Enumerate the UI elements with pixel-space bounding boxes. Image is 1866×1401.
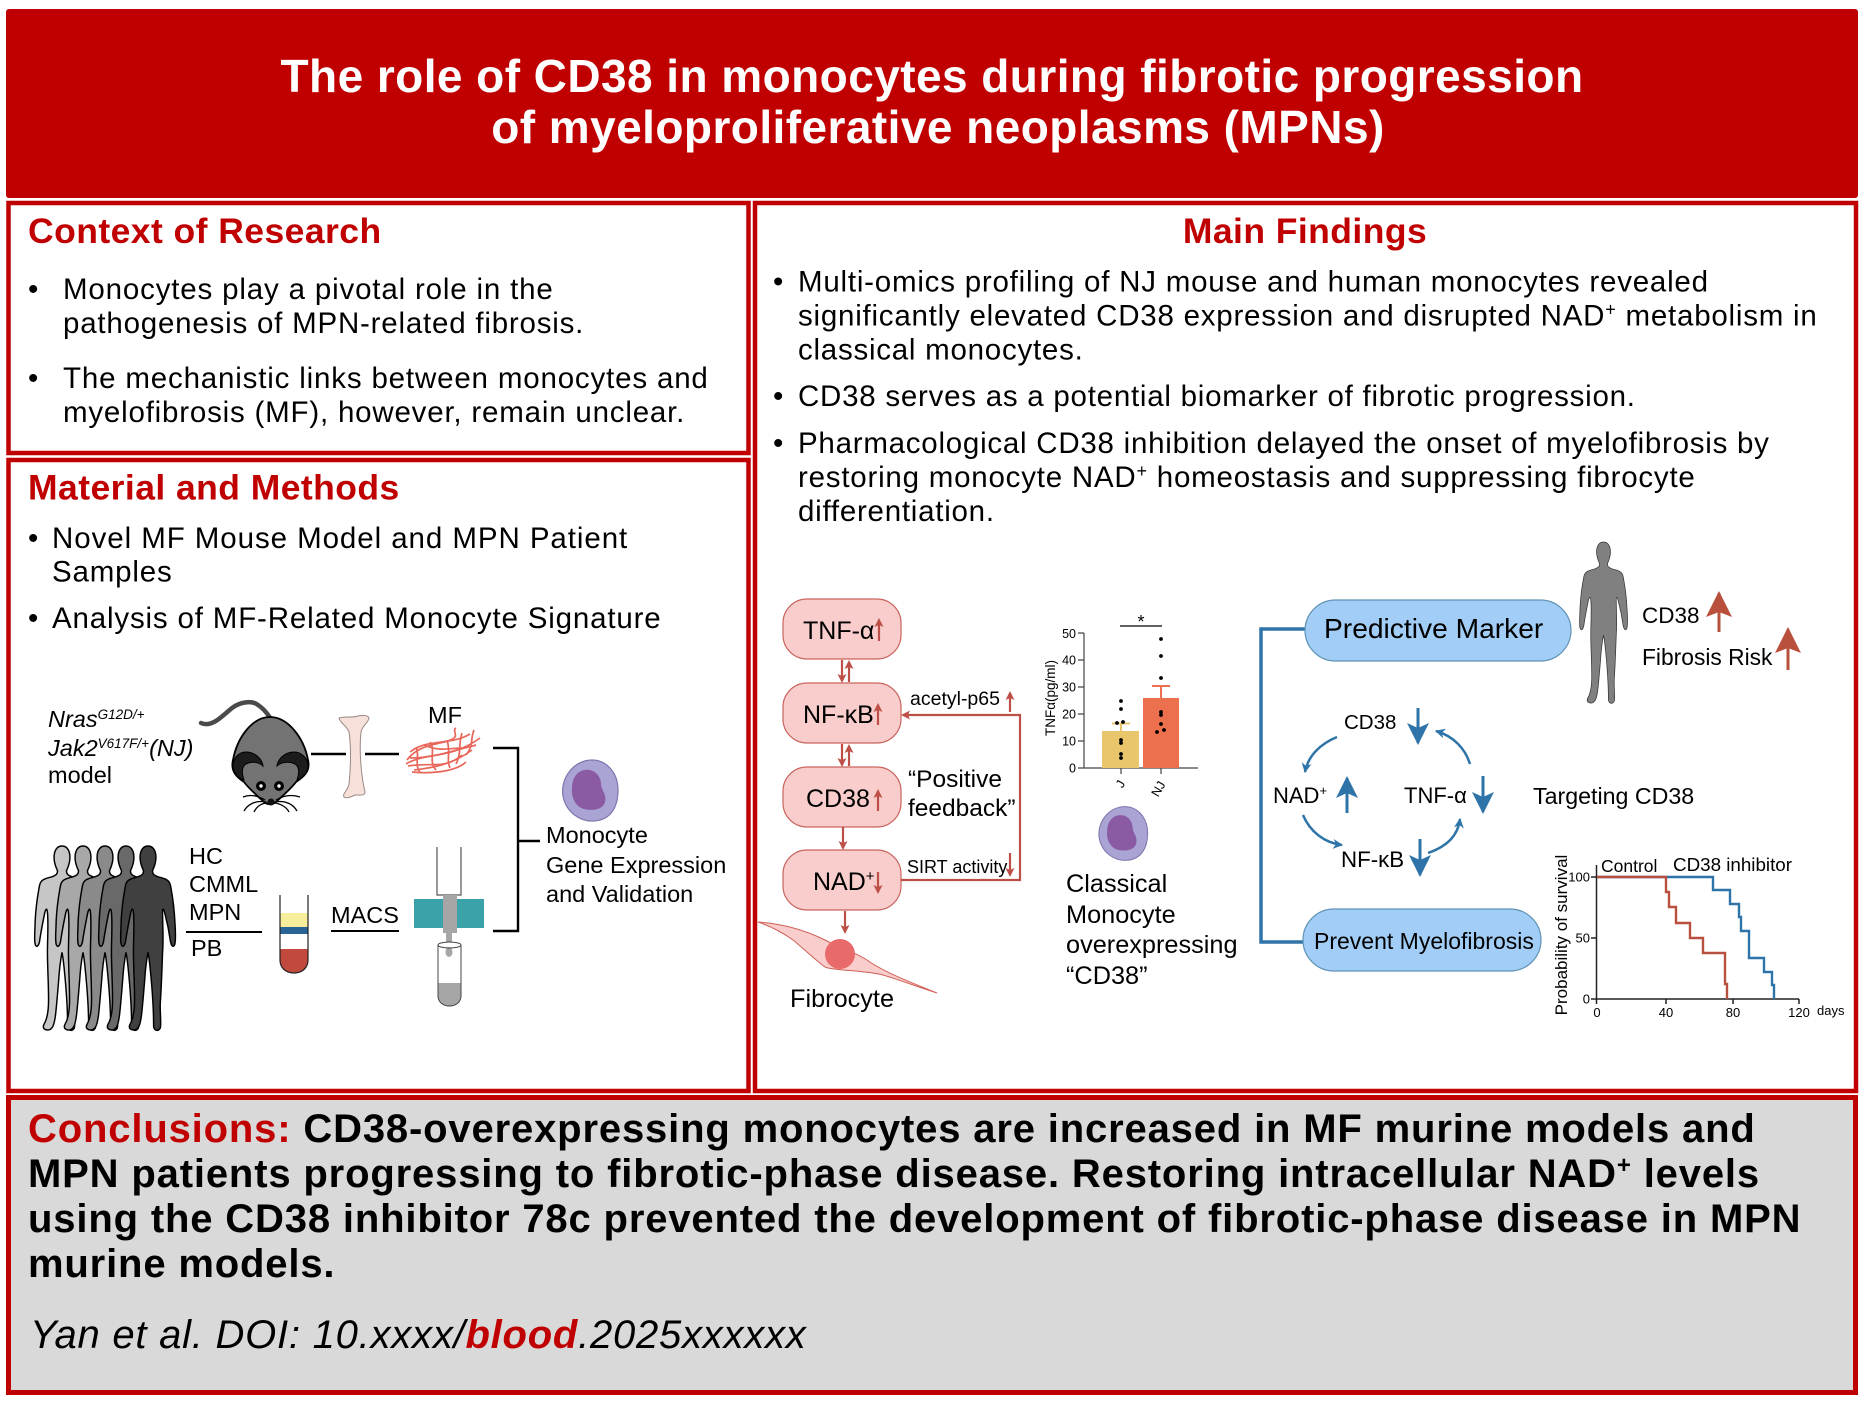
- text block: methods bullets: [28, 522, 662, 635]
- curve: CD38 inhibitor: [1597, 877, 1774, 999]
- text block: findings bullets: classical monocytes.: [798, 334, 1084, 366]
- tick labels: [1568, 870, 1845, 1020]
- label: SIRT activity: SIRT activity: [907, 857, 1007, 877]
- group labels: NJ: [1149, 779, 1168, 799]
- text: classical monocyte overexpressing CD38: overexpressing: [1066, 931, 1238, 959]
- panel: main findings: [755, 203, 1856, 1091]
- node: CD38: [1344, 708, 1418, 743]
- label: targeting CD38: Targeting CD38: [1533, 783, 1694, 809]
- title: The role of CD38 in monocytes during fibrotic progression: [280, 50, 1584, 102]
- label: CD38 up: [1642, 593, 1719, 632]
- text: monocyte gene expression and validation: and Validation: [546, 881, 693, 907]
- labels: HC CMML MPN PB: PB: [191, 935, 222, 961]
- box: NAD+: NAD: [813, 868, 866, 896]
- icon: mouse: [201, 702, 309, 812]
- text block: context bullets: •: [28, 273, 39, 306]
- text block: conclusions: levels: [1632, 1152, 1760, 1196]
- axis tick labels: 50: [1062, 627, 1076, 641]
- axis tick labels: 30: [1062, 680, 1076, 694]
- label: fibrosis risk up: Fibrosis Risk: [1642, 644, 1773, 670]
- bracket connector: [493, 748, 540, 931]
- node: CD38: CD38: [1344, 711, 1396, 734]
- pill: predictive marker: Predictive Marker: [1324, 612, 1543, 644]
- icon: bone: [339, 715, 369, 798]
- labels: HC CMML MPN PB: CMML: [189, 871, 258, 897]
- box: NAD+: +: [866, 868, 875, 885]
- text block: conclusions: Conclusions: CD38-overexpressing monocytes are increased in MF murine models and: [28, 1107, 1756, 1151]
- text block: findings bullets: Multi-omics profiling of NJ mouse and human monocytes revealed: [798, 266, 1709, 298]
- group labels: [1113, 778, 1168, 799]
- text block: methods bullets: Analysis of MF-Related Monocyte Signature: [52, 602, 662, 635]
- box: NAD+: [783, 850, 901, 910]
- group labels: J: [1113, 778, 1128, 790]
- tick labels: 50: [1576, 930, 1590, 946]
- axis tick labels: [1062, 627, 1076, 776]
- bar chart: TNF alpha: [1043, 612, 1198, 799]
- axes: [1591, 865, 1799, 1004]
- axis tick labels: 10: [1062, 734, 1076, 748]
- text block: context bullets: [28, 273, 709, 429]
- axis tick labels: 20: [1062, 708, 1076, 722]
- text block: methods bullets: •: [28, 602, 39, 635]
- label: NJ model: (NJ): [149, 735, 193, 761]
- bar: NJ: [1143, 686, 1179, 768]
- text: classical monocyte overexpressing CD38: Monocyte: [1066, 901, 1176, 929]
- node: NAD+: NAD: [1273, 783, 1319, 808]
- pill: predictive marker: [1305, 600, 1571, 661]
- label: MACS: MACS: [331, 902, 399, 928]
- icon: MACS column: [414, 847, 484, 1006]
- heading: main findings: Main Findings: [1183, 211, 1427, 251]
- label: NJ model: Nras: [48, 706, 98, 732]
- text block: findings bullets: metabolism in: [1617, 300, 1818, 332]
- y axis title: Probability of survival: [1552, 855, 1571, 1015]
- survival chart: [1552, 854, 1845, 1020]
- text: classical monocyte overexpressing CD38: “CD38”: [1066, 962, 1148, 990]
- text block: findings bullets: CD38 serves as a potential biomarker of fibrotic progression.: [798, 380, 1636, 413]
- icon: classical monocyte: [1099, 807, 1148, 860]
- icon: fibrosis fibres: [406, 728, 480, 773]
- label: positive feedback: [908, 766, 1016, 822]
- tick labels: 80: [1726, 1005, 1740, 1020]
- label: NJ model: Jak2: [48, 735, 98, 761]
- labels: HC CMML MPN PB: MPN: [189, 899, 241, 925]
- text block: context bullets: pathogenesis of MPN-related fibrosis.: [63, 307, 584, 340]
- label: NJ model: V617F/+: [98, 736, 149, 751]
- tick labels: 0: [1593, 1005, 1601, 1020]
- text block: findings bullets: •: [773, 380, 784, 413]
- text block: findings bullets: •: [773, 266, 784, 298]
- pill: prevent myelofibrosis: [1303, 909, 1541, 971]
- text: classical monocyte overexpressing CD38: Classical: [1066, 870, 1167, 898]
- icon: fibrocyte: [758, 922, 937, 993]
- label: positive feedback: “Positive: [908, 766, 1002, 793]
- icon: blood tube: [280, 895, 308, 973]
- text block: findings bullets: +: [1137, 461, 1148, 481]
- title: of myeloproliferative neoplasms (MPNs): [491, 101, 1385, 153]
- label: NJ model: [47, 706, 193, 788]
- text block: findings bullets: homeostasis and suppressing fibrocyte: [1148, 461, 1696, 494]
- tick labels: 0: [1583, 992, 1590, 1006]
- label: CD38 up: CD38: [1642, 603, 1700, 628]
- tick labels: days: [1817, 1003, 1845, 1018]
- curve: control: [1597, 877, 1727, 999]
- labels: HC CMML MPN PB: HC: [189, 843, 223, 869]
- legend labels: Control: [1601, 856, 1657, 876]
- text block: conclusions: MPN patients progressing to fibrotic-phase disease. Restoring intracellular NAD: [28, 1152, 1617, 1196]
- title: [280, 50, 1584, 153]
- node: NF-kB: [1341, 839, 1420, 875]
- cycle arrows: [1303, 731, 1470, 853]
- text block: conclusions: murine models.: [28, 1242, 335, 1286]
- tick labels: 100: [1568, 870, 1590, 884]
- pill: prevent myelofibrosis: Prevent Myelofibrosis: [1314, 928, 1534, 954]
- box: NF-kB: NF-κB: [803, 701, 874, 729]
- label: fibrocyte: Fibrocyte: [790, 985, 894, 1013]
- box: CD38: [783, 767, 901, 827]
- text block: findings bullets: differentiation.: [798, 495, 995, 528]
- text block: findings bullets: restoring monocyte NAD: [798, 461, 1137, 494]
- connector: predictive marker to prevent myelofibrosis: [1261, 629, 1305, 942]
- text block: findings bullets: significantly elevated CD38 expression and disrupted NAD: [798, 300, 1605, 332]
- heading: context of research: Context of Research: [28, 211, 382, 251]
- text block: findings bullets: +: [1605, 300, 1617, 320]
- axis tick labels: 40: [1062, 654, 1076, 668]
- node: NF-kB: NF-κB: [1341, 847, 1404, 872]
- arrows between boxes: [842, 660, 849, 932]
- citation: Yan et al. DOI: 10.xxxx/blood.2025xxxxxx: [30, 1313, 808, 1357]
- node: NAD+: [1273, 778, 1347, 813]
- icon: group of people: [35, 846, 176, 1030]
- text block: context bullets: •: [28, 362, 39, 395]
- header banner: [6, 9, 1858, 198]
- panel: material and methods: [8, 460, 748, 1091]
- legend labels: [1601, 854, 1792, 876]
- text block: conclusions: [28, 1107, 1801, 1286]
- text block: methods bullets: Samples: [52, 556, 173, 588]
- panel: conclusions: [8, 1098, 1856, 1392]
- node: TNF-alpha: [1404, 776, 1483, 812]
- label: acetyl-p65: acetyl-p65: [910, 688, 1000, 710]
- panel: context of research: [8, 203, 748, 453]
- axis tick labels: 0: [1069, 762, 1076, 776]
- box: CD38: CD38: [806, 785, 870, 813]
- box: TNF-alpha: [783, 599, 901, 659]
- significance bar: *: [1137, 612, 1145, 632]
- text block: findings bullets: •: [773, 427, 784, 460]
- text block: context bullets: myelofibrosis (MF), however, remain unclear.: [63, 396, 685, 429]
- node: NAD+: +: [1319, 783, 1327, 798]
- text: classical monocyte overexpressing CD38: [1066, 870, 1238, 990]
- data points: [1115, 637, 1166, 760]
- text block: findings bullets: [773, 266, 1818, 528]
- label: MF: MF: [428, 702, 462, 728]
- feedback loop arrow: [901, 715, 1020, 880]
- icon: patient silhouette: [1580, 542, 1628, 703]
- labels: HC CMML MPN PB: [186, 843, 262, 961]
- heading: material and methods: Material and Methods: [28, 468, 400, 508]
- significance bar: [1120, 612, 1162, 632]
- tick labels: 40: [1659, 1005, 1673, 1020]
- text block: conclusions: using the CD38 inhibitor 78c prevented the development of fibrotic-phase disease in MPN: [28, 1197, 1801, 1241]
- bar: J: [1102, 723, 1139, 768]
- cycle: targeting CD38: [1273, 708, 1694, 875]
- box: NF-kB: [783, 683, 901, 743]
- text block: methods bullets: •: [28, 522, 39, 555]
- label: NJ model: model: [48, 762, 112, 788]
- text block: context bullets: Monocytes play a pivotal role in the: [63, 273, 554, 306]
- tick labels: 120: [1788, 1005, 1810, 1020]
- pathway: positive feedback flow: [758, 599, 1020, 1013]
- y axis title: TNFα(pg/ml): [1043, 660, 1058, 736]
- text block: methods bullets: Novel MF Mouse Model and MPN Patient: [52, 522, 628, 555]
- icon: monocyte: [563, 760, 618, 821]
- text block: findings bullets: Pharmacological CD38 inhibition delayed the onset of myelofibrosis by: [798, 427, 1770, 460]
- legend labels: CD38 inhibitor: [1673, 854, 1792, 875]
- text block: context bullets: The mechanistic links between monocytes and: [63, 362, 709, 395]
- text: monocyte gene expression and validation: [546, 822, 726, 907]
- text: monocyte gene expression and validation: Monocyte: [546, 822, 648, 848]
- label: positive feedback: feedback”: [908, 795, 1016, 822]
- label: NJ model: G12D/+: [98, 707, 145, 722]
- text: monocyte gene expression and validation: Gene Expression: [546, 852, 726, 878]
- node: TNF-alpha: TNF-α: [1404, 783, 1467, 808]
- text block: conclusions: +: [1617, 1152, 1632, 1179]
- connector: mouse to bone: [311, 753, 399, 755]
- box: TNF-alpha: TNF-α: [803, 617, 874, 645]
